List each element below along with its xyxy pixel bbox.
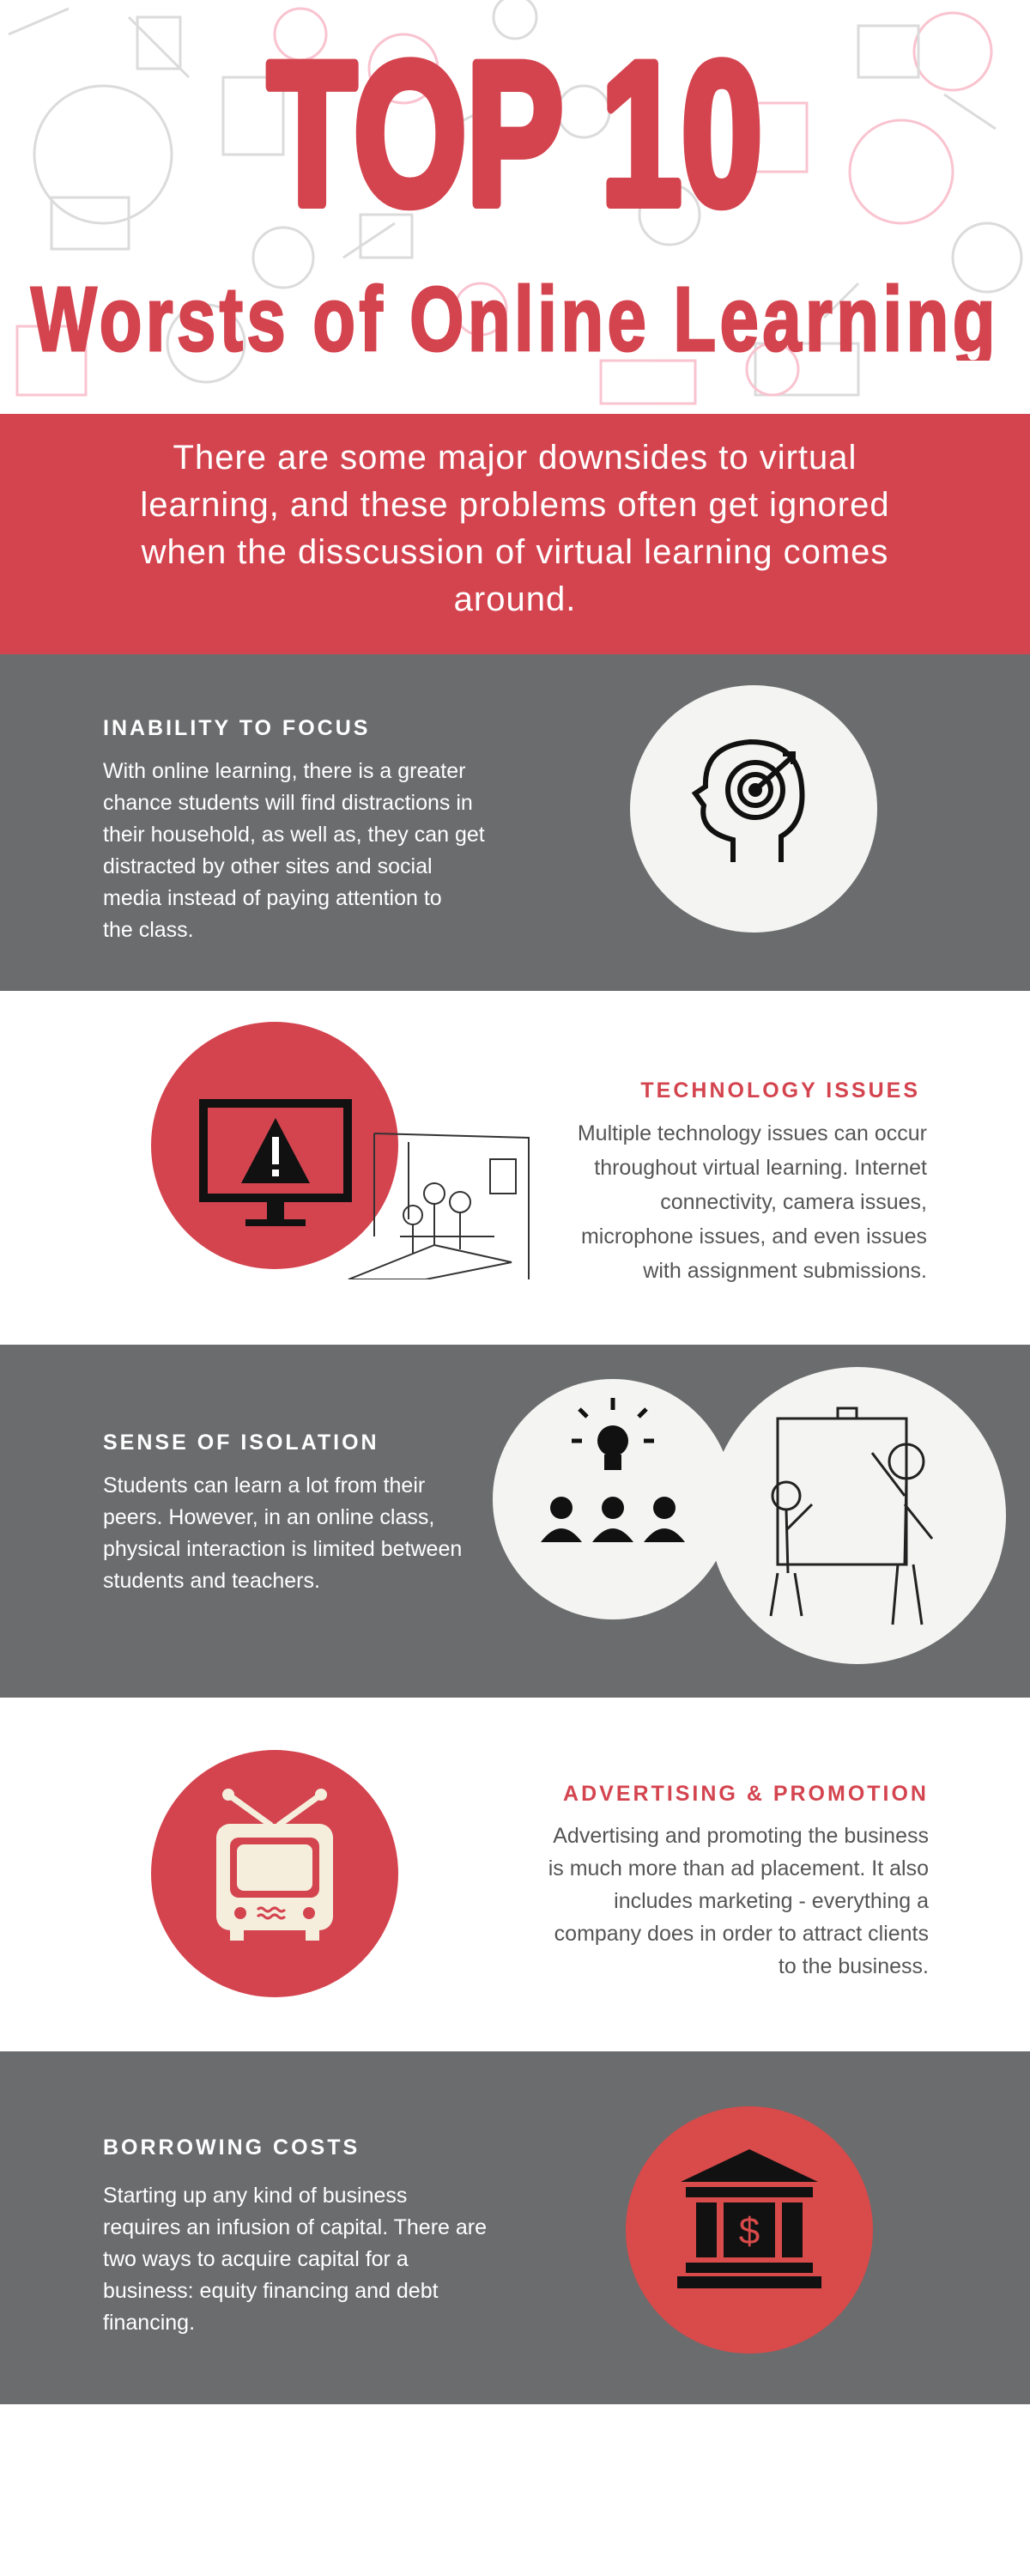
intro banner: around. [454, 580, 576, 618]
text: Multiple technology issues can occur [578, 1121, 927, 1145]
text: company does in order to attract clients [554, 1922, 929, 1946]
intro banner: when the disscussion of virtual learning comes [142, 533, 888, 571]
text: requires an infusion of capital. There are [103, 2215, 487, 2239]
panel: inability to focus [0, 654, 1030, 991]
text: distracted by other sites and social [103, 854, 433, 878]
icon: bank: $ [739, 2210, 760, 2252]
text [103, 1473, 462, 1593]
text: peers. However, in an online class, [103, 1505, 434, 1529]
panel: advertising & promotion [151, 1750, 929, 1997]
panel: sense of isolation [0, 1345, 1030, 1698]
text: students and teachers. [103, 1569, 320, 1593]
icon: head with target [630, 685, 877, 933]
text [578, 1121, 927, 1283]
sketch: classroom [348, 1133, 529, 1279]
text: microphone issues, and even issues [581, 1224, 927, 1249]
text: chance students will find distractions in [103, 791, 473, 815]
sketch: whiteboard [716, 1367, 1006, 1664]
text [103, 759, 485, 942]
icon: tv [151, 1750, 398, 1997]
header background doodles [9, 0, 1023, 405]
heading: ADVERTISING & PROMOTION [563, 1782, 929, 1806]
text: with assignment submissions. [643, 1259, 927, 1283]
text [548, 1824, 929, 1978]
panel: borrowing costs [0, 2051, 1030, 2404]
text: to the business. [779, 1954, 929, 1978]
text: physical interaction is limited between [103, 1537, 462, 1561]
text: Starting up any kind of business [103, 2184, 407, 2208]
text: With online learning, there is a greater [103, 759, 465, 783]
heading: BORROWING COSTS [103, 2136, 360, 2160]
icon: warning monitor [151, 1022, 530, 1279]
intro banner [0, 414, 1030, 654]
text: includes marketing - everything a [614, 1889, 929, 1913]
icon: bank [626, 2106, 873, 2354]
intro banner: There are some major downsides to virtual [173, 439, 857, 477]
title: TOP 10 [268, 21, 762, 247]
text: Students can learn a lot from their [103, 1473, 425, 1498]
text: is much more than ad placement. It also [548, 1856, 929, 1880]
panel: technology issues [151, 1022, 927, 1283]
text: two ways to acquire capital for a [103, 2247, 409, 2271]
heading: TECHNOLOGY ISSUES [640, 1078, 920, 1103]
intro banner: learning, and these problems often get ignored [140, 486, 890, 524]
text: financing. [103, 2311, 195, 2335]
text: their household, as well as, they can get [103, 823, 485, 847]
text: media instead of paying attention to [103, 886, 442, 910]
heading: SENSE OF ISOLATION [103, 1431, 379, 1455]
text: connectivity, camera issues, [660, 1190, 927, 1214]
icon: idea group [493, 1379, 724, 1619]
heading: INABILITY TO FOCUS [103, 716, 370, 740]
text: throughout virtual learning. Internet [594, 1156, 927, 1180]
text: business: equity financing and debt [103, 2279, 439, 2303]
text: the class. [103, 918, 194, 942]
text [103, 2184, 487, 2335]
text: Advertising and promoting the business [553, 1824, 929, 1848]
